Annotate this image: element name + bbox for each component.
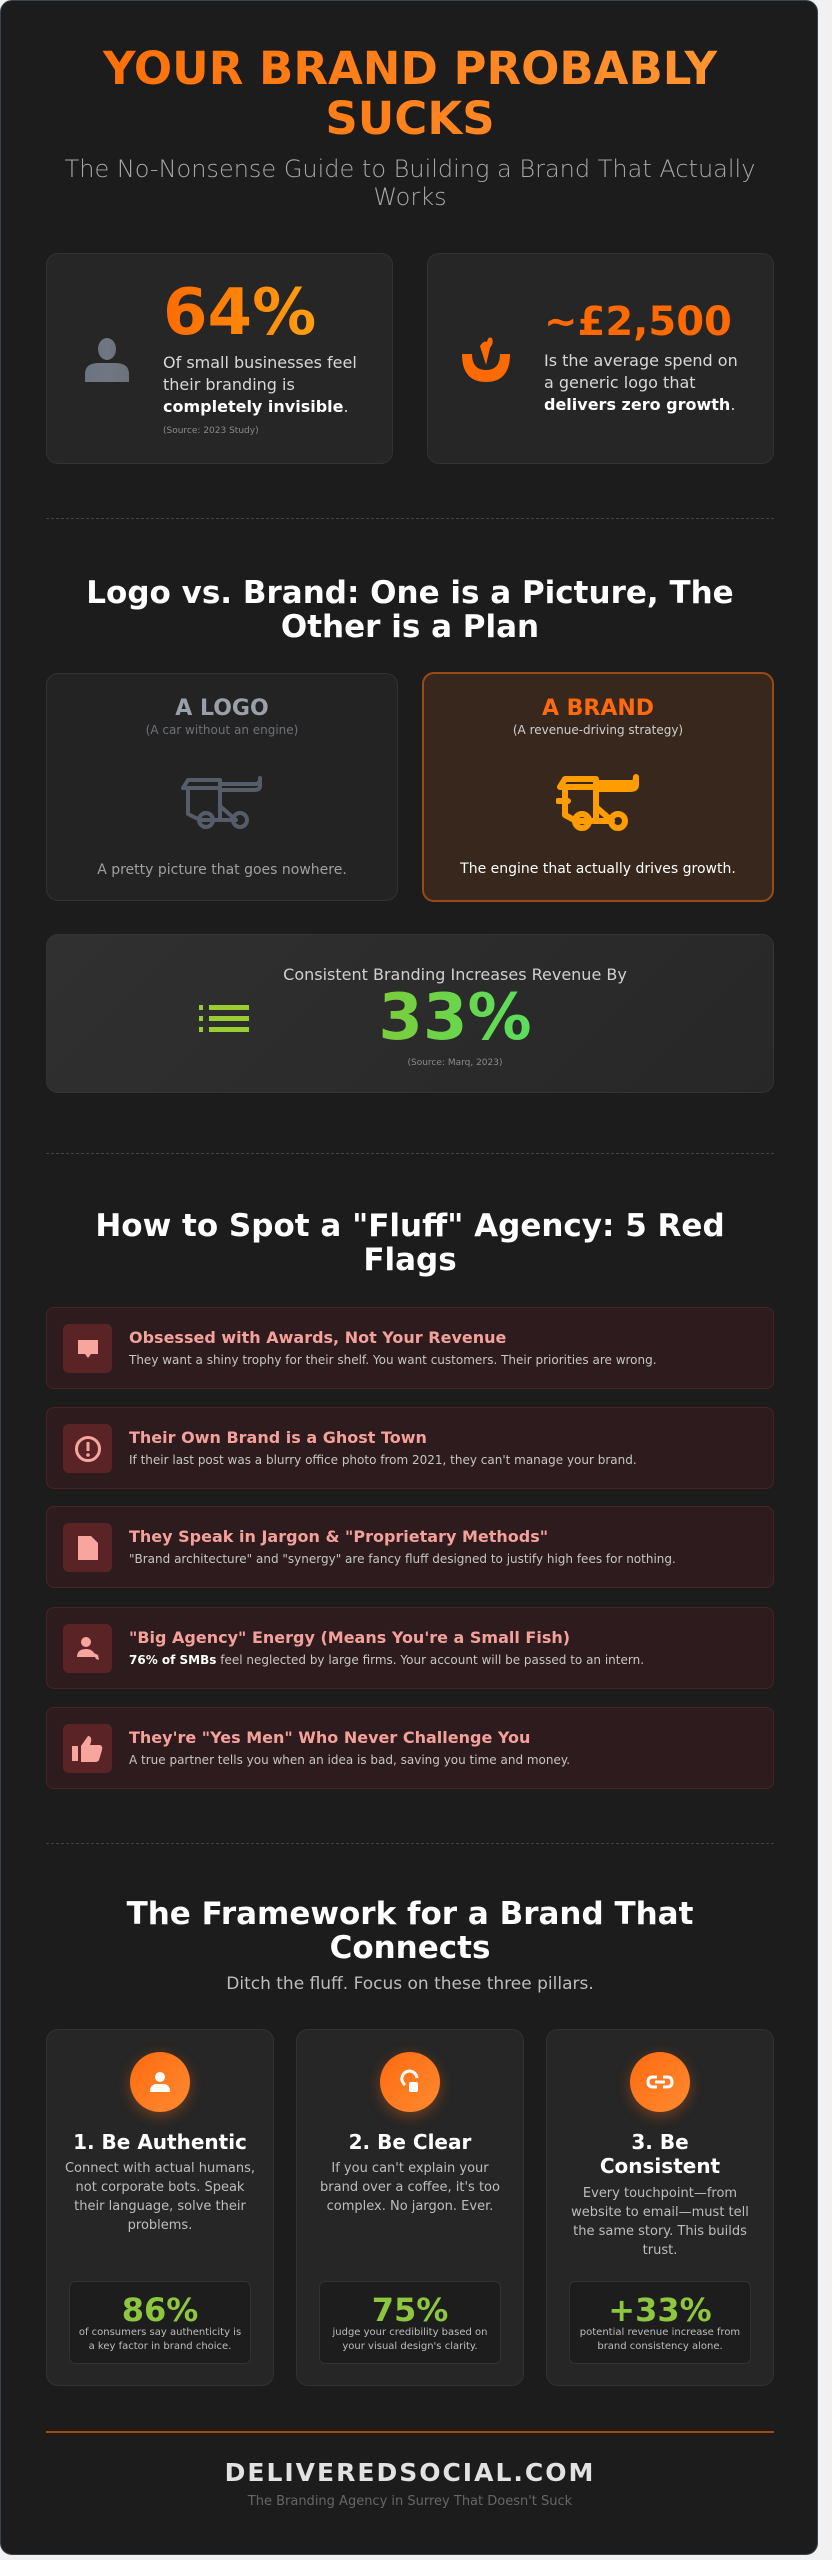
banner text: Consistent Branding Increases Revenue By	[283, 965, 627, 984]
footer brand: DELIVEREDSOCIAL.COM	[225, 2458, 595, 2487]
heading: logo vs brand: Other is a Plan	[281, 609, 539, 645]
red flag 3	[46, 1506, 774, 1588]
pillar 3: the same story. This builds	[573, 2224, 747, 2239]
title	[1, 44, 819, 144]
stat box: judge your credibility based on	[332, 2327, 488, 2338]
footer tagline: The Branding Agency in Surrey That Doesn't Suck	[248, 2494, 572, 2509]
heading: logo vs brand	[86, 575, 734, 645]
heading: logo vs brand: Logo vs. Brand: One is a Picture, The	[86, 575, 734, 611]
title: SUCKS	[325, 92, 495, 145]
icon: link	[630, 2052, 690, 2112]
icon: exclamation	[63, 1424, 112, 1473]
stat number 64%: 64%	[163, 276, 316, 350]
panel: a logo	[46, 673, 398, 901]
stat box	[69, 2281, 251, 2364]
stat box	[569, 2281, 751, 2364]
subtitle: The No-Nonsense Guide to Building a Brand That Actually	[65, 155, 755, 183]
icon: file	[63, 1523, 112, 1572]
red flag 1: Obsessed with Awards, Not Your Revenue	[129, 1328, 506, 1347]
label: A LOGO	[175, 696, 269, 721]
pillar 3	[546, 2029, 774, 2386]
red flag 5	[46, 1707, 774, 1789]
red flag 4: "Big Agency" Energy (Means You're a Small Fish)	[129, 1628, 570, 1647]
red flag 5: They're "Yes Men" Who Never Challenge You	[129, 1728, 530, 1747]
label: A BRAND	[542, 696, 654, 721]
red flag 2	[46, 1407, 774, 1489]
red flag 5: A true partner tells you when an idea is bad, saving you time and money.	[129, 1753, 570, 1767]
heading: framework: The Framework for a Brand That	[127, 1896, 693, 1932]
caption: A pretty picture that goes nowhere.	[97, 862, 347, 878]
stat number £2,500: ~£2,500	[544, 299, 732, 345]
stat text: Of small businesses feel	[163, 353, 357, 372]
footer rule	[46, 2431, 774, 2433]
pillar 3: trust.	[643, 2243, 677, 2258]
heading: framework: Connects	[330, 1930, 490, 1966]
icon: person	[85, 338, 129, 382]
panel: a brand: (A revenue-driving strategy)	[513, 723, 683, 737]
pillar 1: their language, solve their	[74, 2199, 246, 2214]
icon: cart orange	[556, 774, 639, 831]
red flag 2: If their last post was a blurry office photo from 2021, they can't manage your brand.	[129, 1453, 637, 1467]
icon: head	[380, 2052, 440, 2112]
stat box: potential revenue increase from	[580, 2327, 740, 2338]
icon: user	[130, 2052, 190, 2112]
red flag 1	[46, 1307, 774, 1389]
heading: red flags: How to Spot a "Fluff" Agency: 5 Red	[95, 1208, 725, 1244]
title: YOUR BRAND PROBABLY	[103, 42, 717, 95]
stat text: a generic logo that	[544, 373, 696, 392]
source: (Source: Marq, 2023)	[408, 1058, 502, 1068]
banner number: 33%	[378, 981, 532, 1055]
panel: a brand	[422, 672, 774, 902]
pillar 1: problems.	[128, 2218, 192, 2233]
banner: 33% revenue	[46, 934, 774, 1093]
red flag 4	[46, 1607, 774, 1689]
red flag 2: Their Own Brand is a Ghost Town	[129, 1428, 427, 1447]
subtitle	[65, 155, 755, 211]
stat card: 64%	[46, 253, 393, 464]
heading: red flags: Flags	[363, 1242, 457, 1278]
pillar 1: 1. Be Authentic	[73, 2130, 247, 2154]
red flag 3: "Brand architecture" and "synergy" are fancy fluff designed to justify high fees for nothing.	[129, 1552, 676, 1566]
heading: framework	[126, 1896, 693, 1966]
red flag 4: 76% of SMBs feel neglected by large firms. Your account will be passed to an intern.	[129, 1653, 644, 1667]
stat box: 86%	[122, 2291, 198, 2329]
icon: user hand	[63, 1624, 112, 1673]
stat text: Is the average spend on	[544, 351, 738, 370]
framework subtitle: Ditch the fluff. Focus on these three pillars.	[226, 1974, 594, 1994]
pillar 3: Every touchpoint—from	[583, 2186, 737, 2201]
icon: comment	[63, 1324, 112, 1373]
stat card: £2,500	[427, 253, 774, 464]
pillar 1	[46, 2029, 274, 2386]
pillar 3: 3. Be	[631, 2130, 689, 2154]
heading: red flags	[95, 1208, 725, 1278]
stat text: their branding is	[163, 375, 295, 394]
pillar 2: 2. Be Clear	[349, 2130, 471, 2154]
panel: a logo: (A car without an engine)	[146, 723, 298, 737]
stat box: +33%	[608, 2291, 712, 2329]
stat box: a key factor in brand choice.	[89, 2341, 231, 2352]
pillar 2: brand over a coffee, it's too	[320, 2180, 500, 2195]
stat text: completely invisible.	[163, 397, 349, 416]
pillar 2: If you can't explain your	[331, 2161, 489, 2176]
pillar 3: Consistent	[600, 2154, 720, 2178]
pillar 2: complex. No jargon. Ever.	[327, 2199, 493, 2214]
stat text	[163, 353, 357, 416]
icon: cart	[181, 776, 262, 829]
icon: thumbs up	[63, 1724, 112, 1773]
icon: list	[199, 1005, 249, 1032]
pillar 3: website to email—must tell	[571, 2205, 749, 2220]
stat box: your visual design's clarity.	[342, 2341, 478, 2352]
caption: The engine that actually drives growth.	[460, 861, 736, 877]
stat text	[544, 351, 738, 414]
icon: hand coin	[462, 338, 510, 382]
pillar 1: not corporate bots. Speak	[76, 2180, 244, 2195]
red flag 3: They Speak in Jargon & "Proprietary Methods"	[129, 1527, 548, 1546]
pillar 2	[296, 2029, 524, 2386]
source: (Source: 2023 Study)	[163, 426, 259, 436]
stat text: delivers zero growth.	[544, 395, 735, 414]
stat box: brand consistency alone.	[597, 2341, 723, 2352]
pillar 1: Connect with actual humans,	[65, 2161, 255, 2176]
stat box: 75%	[372, 2291, 448, 2329]
subtitle: Works	[373, 183, 447, 211]
stat box: of consumers say authenticity is	[79, 2327, 241, 2338]
red flag 1: They want a shiny trophy for their shelf. You want customers. Their priorities are wrong.	[129, 1353, 657, 1367]
stat box	[319, 2281, 501, 2364]
